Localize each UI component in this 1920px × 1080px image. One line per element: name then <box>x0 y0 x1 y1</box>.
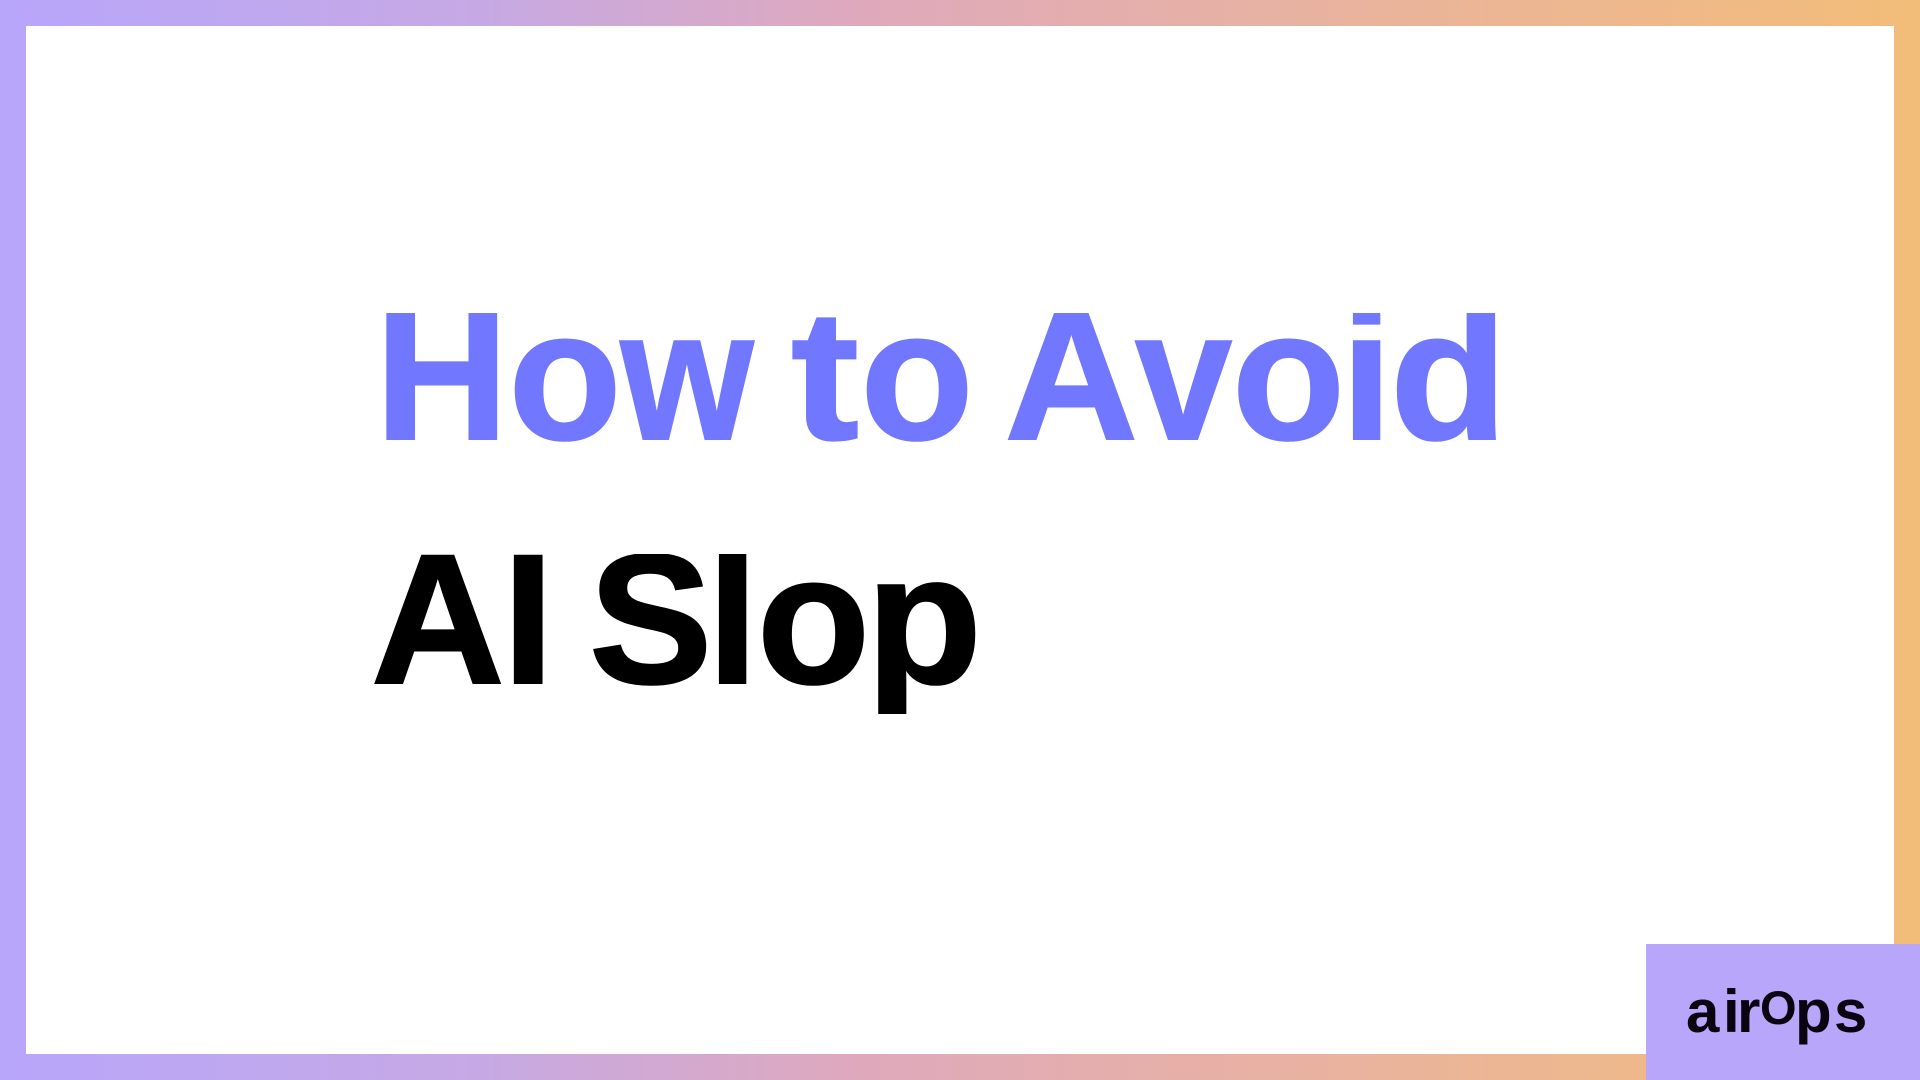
title line 2: AI Slop: I <box>502 517 554 723</box>
logo badge <box>1646 944 1920 1080</box>
title line 1: How to Avoid: i <box>1341 273 1392 479</box>
logo: airOps: p <box>1795 978 1832 1045</box>
logo: airOps: r <box>1737 978 1760 1045</box>
logo: airOps: i <box>1723 978 1740 1045</box>
title line 1: How to Avoid: d <box>1390 273 1508 479</box>
title line 1: How to Avoid: o <box>860 273 974 479</box>
title line 2: AI Slop: o <box>757 517 870 723</box>
title line 1: How to Avoid: w <box>620 273 755 479</box>
title line 2: AI Slop: A <box>371 517 505 723</box>
logo: airOps: a <box>1686 978 1720 1045</box>
title line 1: How to Avoid: H <box>375 273 509 479</box>
title line 1: How to Avoid: A <box>1004 273 1138 479</box>
title line 1: How to Avoid: o <box>1232 273 1345 479</box>
title line 1: How to Avoid: o <box>508 273 622 479</box>
title line 2: AI Slop: l <box>707 517 758 723</box>
title line 1: How to Avoid: v <box>1135 273 1232 479</box>
title line 2: AI Slop: S <box>589 517 712 723</box>
title <box>374 313 1496 714</box>
logo: airOps: s <box>1834 978 1867 1045</box>
title line 1: How to Avoid: t <box>791 273 859 479</box>
logo: airOps: O <box>1760 981 1797 1034</box>
title line 2: AI Slop: p <box>866 517 982 723</box>
